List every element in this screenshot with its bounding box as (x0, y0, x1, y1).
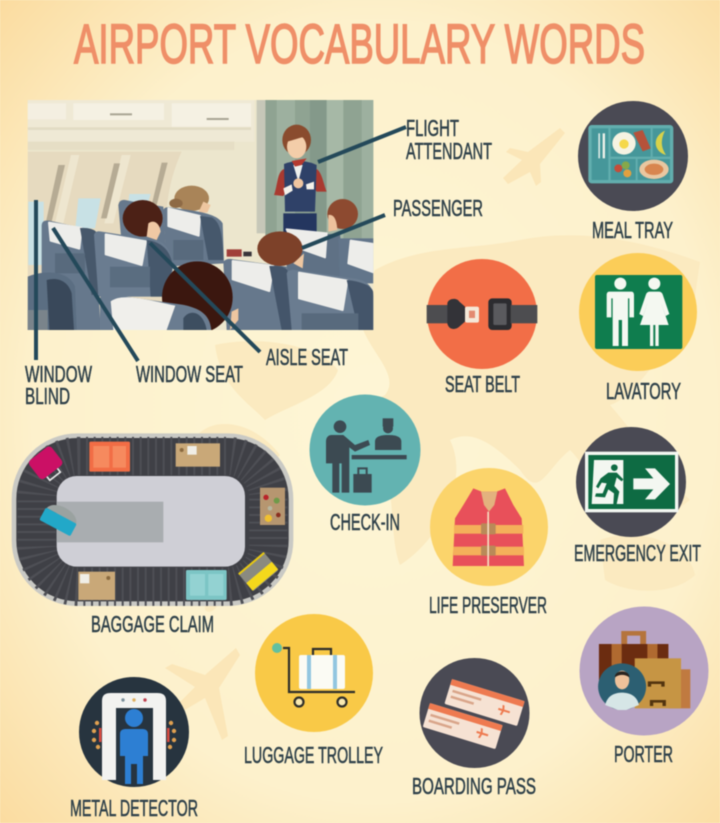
label: life preserver: LIFE PRESERVER (429, 592, 547, 618)
label: boarding pass: BOARDING PASS (412, 773, 536, 799)
label: baggage claim: BAGGAGE CLAIM (91, 611, 214, 637)
label: flight attendant: FLIGHT (406, 115, 459, 141)
panel: meal tray (578, 101, 688, 243)
label: aisle seat: AISLE SEAT (266, 344, 348, 370)
label: luggage trolley: LUGGAGE TROLLEY (244, 742, 383, 768)
panel: check-in (310, 394, 420, 535)
leader lines (36, 127, 406, 361)
panel: metal detector (70, 677, 198, 821)
label: window blind: WINDOW (25, 361, 92, 387)
icon: baggage carousel (14, 436, 291, 604)
icon: exit sign (576, 427, 686, 537)
leader: aisle seat (150, 243, 260, 352)
panel: porter (580, 606, 708, 767)
background airplane: top (503, 128, 565, 186)
panel: emergency exit (574, 427, 701, 566)
panel: baggage claim (14, 436, 291, 637)
label: passenger: PASSENGER (393, 195, 483, 221)
icon: meal tray (578, 101, 688, 211)
label: seat belt: SEAT BELT (445, 371, 520, 397)
side wall with windows (28, 152, 181, 302)
bag: yellow (238, 552, 279, 591)
box: top tan (176, 443, 220, 467)
door and curtain (257, 100, 373, 243)
leader: passenger (302, 215, 385, 248)
leader: window seat (53, 228, 138, 361)
flight attendant figure (274, 125, 327, 233)
label: meal tray: MEAL TRAY (592, 217, 673, 243)
label: window seat: WINDOW SEAT (136, 361, 243, 387)
panel: cabin illustration (28, 100, 373, 333)
icon: life jacket (430, 468, 548, 586)
front row seats (28, 272, 211, 330)
box: bottom tan (78, 572, 115, 600)
icon: tickets (420, 658, 530, 768)
background airplane: bottom (165, 648, 240, 740)
passenger: blonde (169, 186, 211, 213)
bag: teal (186, 570, 227, 600)
panel: lavatory (579, 253, 697, 404)
box: stickers (260, 488, 285, 525)
passenger: man at front (327, 199, 358, 232)
label: window blind: BLIND (25, 383, 70, 409)
icon: seat belt (427, 259, 537, 369)
passenger: brown hair (257, 231, 304, 268)
back row seats (118, 200, 373, 283)
panel: luggage trolley (244, 614, 383, 768)
bag: magenta (27, 445, 67, 484)
panel: life preserver (429, 468, 548, 618)
passenger: dark hair (123, 200, 163, 240)
panel: boarding pass (412, 658, 536, 799)
label: metal detector: METAL DETECTOR (70, 795, 198, 821)
bag: blue (39, 500, 81, 536)
label: flight attendant: ATTENDANT (406, 138, 492, 164)
passenger: aisle hair (162, 261, 238, 333)
middle row seats (42, 220, 373, 330)
overhead bins (28, 102, 252, 130)
background world map (184, 235, 700, 612)
icon: porter and luggage (580, 606, 708, 736)
bag: orange (89, 442, 130, 472)
leader: window blind (34, 200, 38, 360)
label: porter: PORTER (614, 741, 673, 767)
leader: flight attendant (318, 127, 406, 162)
icon: check-in desk (310, 394, 420, 506)
panel: seat belt (427, 259, 537, 397)
label: check-in: CHECK-IN (330, 509, 400, 535)
icon: metal detector (79, 677, 189, 787)
label: lavatory: LAVATORY (606, 378, 681, 404)
icon: trolley (255, 614, 373, 732)
icon: lavatory sign (579, 253, 697, 371)
